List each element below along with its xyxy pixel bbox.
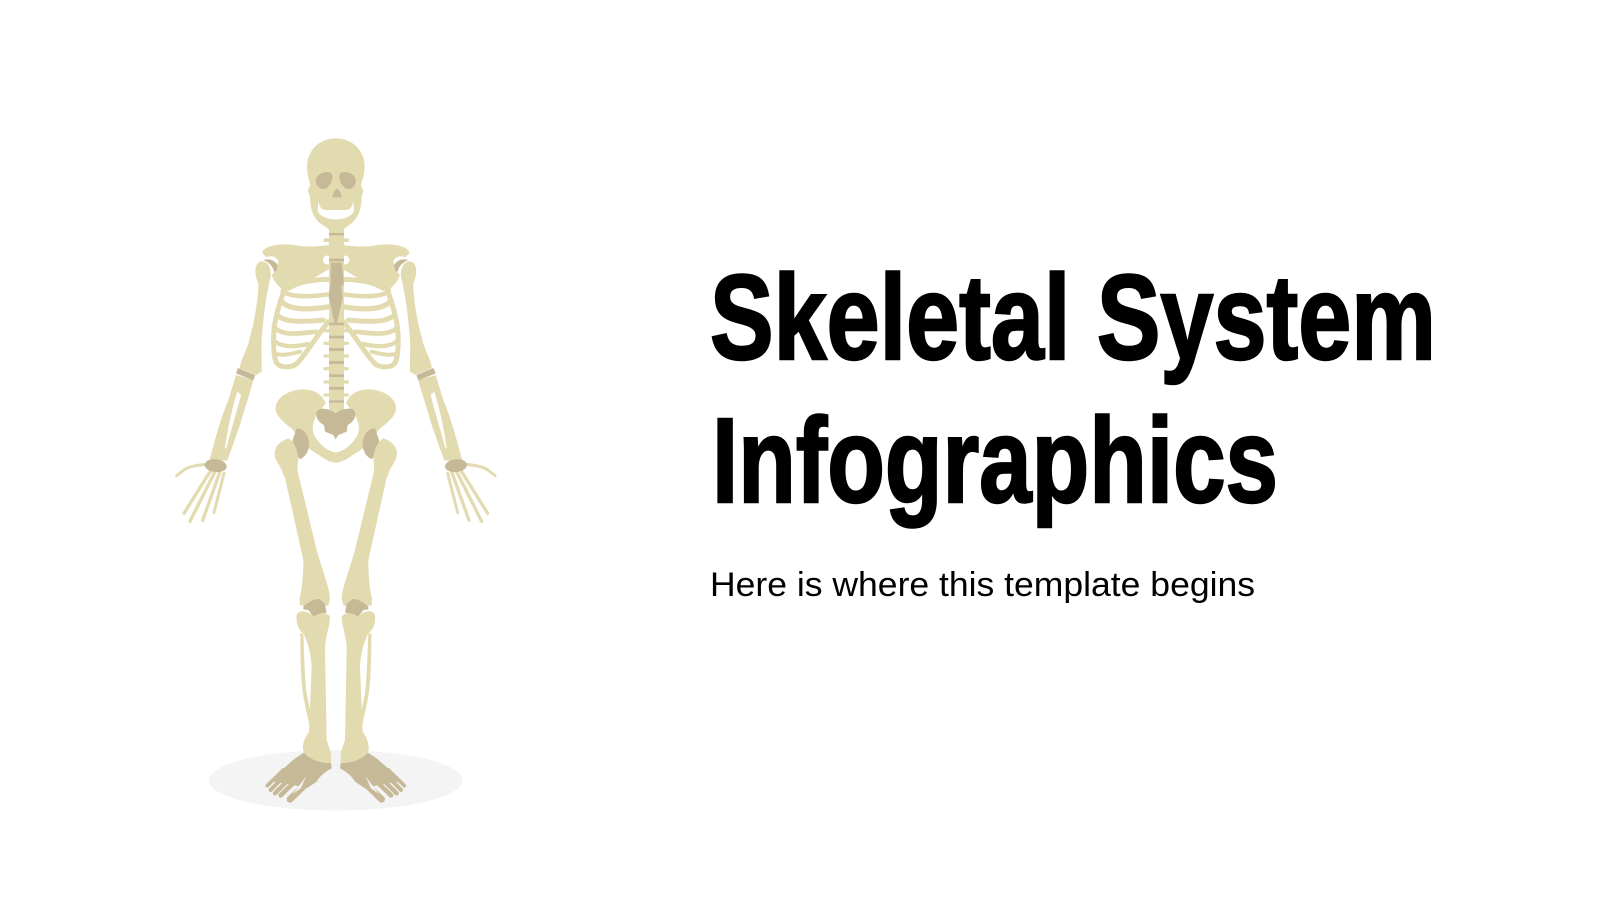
upper body: arms, ribs and pelvis [204,138,468,477]
illustration: skeleton [177,138,495,811]
sternum [329,263,344,323]
lower body: legs, feet and hands [177,458,495,799]
subtitle: Here is where this template begins [710,566,1255,604]
title line 2: Infographics [712,392,1278,528]
title [710,249,1436,528]
skull [307,138,365,229]
spine [323,228,349,412]
sacrum [316,409,355,439]
ground shadow [209,750,463,811]
